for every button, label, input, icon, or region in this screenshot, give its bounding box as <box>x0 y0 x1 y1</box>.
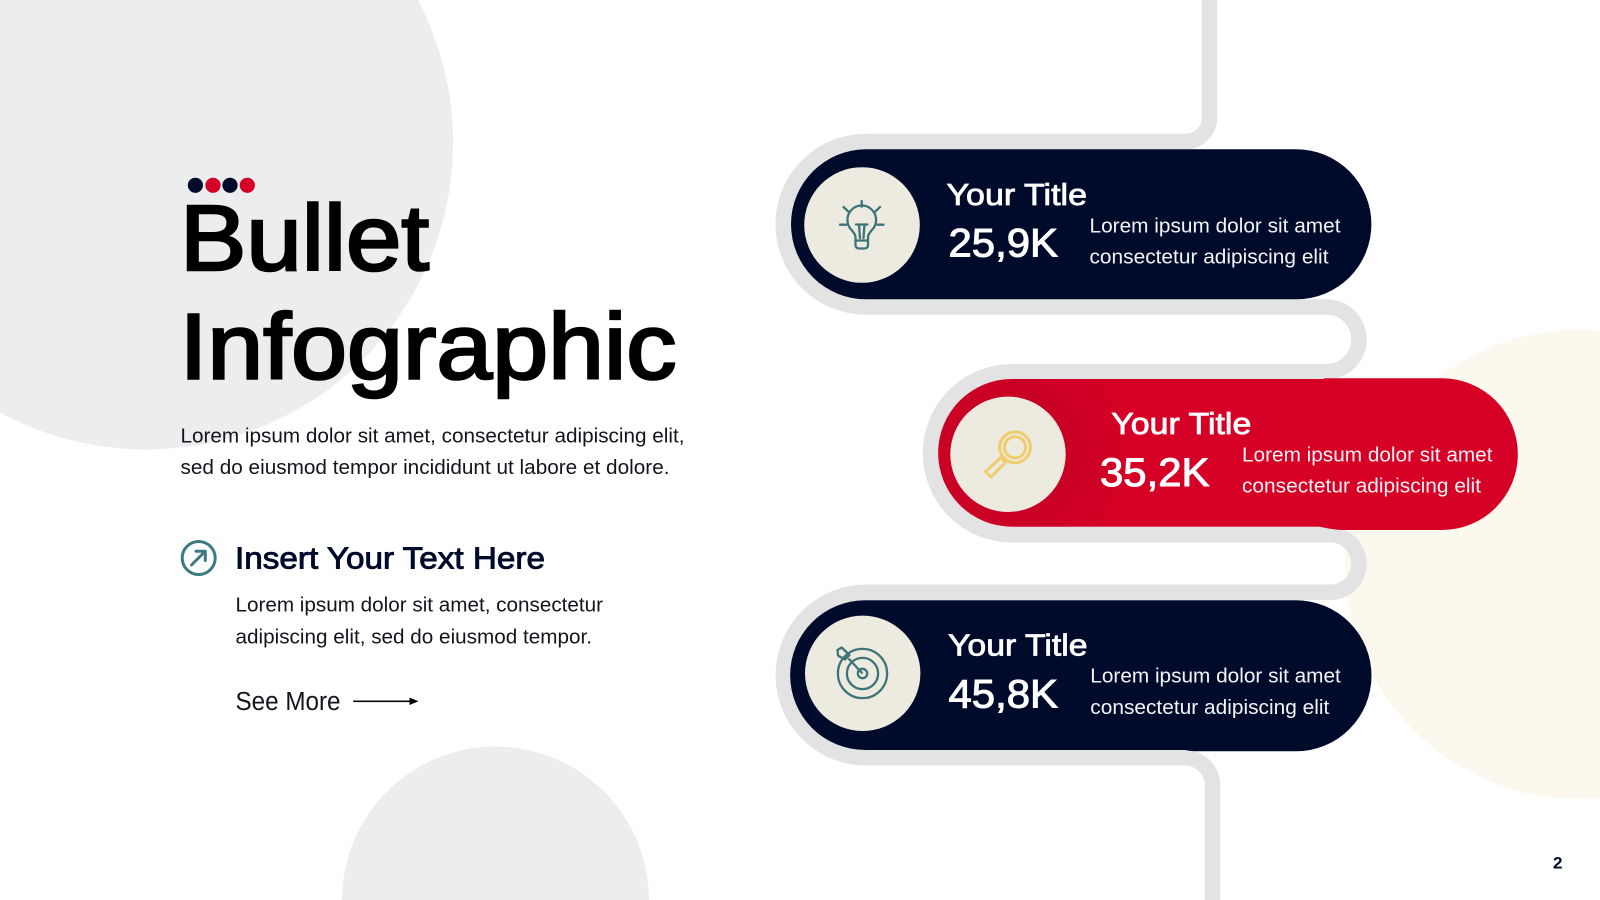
card title: Your Title <box>1111 406 1251 441</box>
background circle: right cream <box>1345 330 1600 799</box>
description <box>1090 666 1341 719</box>
description: consectetur adipiscing elit <box>1242 476 1481 498</box>
winding grey track <box>783 0 1359 900</box>
description <box>1090 215 1341 268</box>
card title: Your Title <box>946 177 1087 212</box>
intro paragraph: sed do eiusmod tempor incididunt ut labore et dolore. <box>180 457 670 479</box>
description: consectetur adipiscing elit <box>1090 697 1330 719</box>
pill background navy <box>790 600 1372 751</box>
subheading: Insert Your Text Here <box>235 541 545 576</box>
title: Bullet <box>180 186 429 290</box>
sub paragraph: adipiscing elit, sed do eiusmod tempor. <box>236 626 592 648</box>
icon: target <box>805 616 920 731</box>
card title: Your Title <box>948 627 1088 662</box>
page number: 2 <box>1553 854 1562 872</box>
title: Infographic <box>180 294 676 398</box>
sub paragraph <box>236 595 603 648</box>
icon: light bulb <box>804 167 920 283</box>
panel: third item <box>790 600 1372 751</box>
description: Lorem ipsum dolor sit amet <box>1090 215 1341 237</box>
description: consectetur adipiscing elit <box>1090 246 1329 268</box>
background circle: top left <box>0 0 453 449</box>
value: 25,9K <box>948 222 1058 266</box>
description: Lorem ipsum dolor sit amet <box>1242 445 1493 467</box>
panel: first item <box>791 149 1371 299</box>
pill background navy <box>791 149 1371 299</box>
see more link: See More <box>236 688 340 716</box>
sub paragraph: Lorem ipsum dolor sit amet, consectetur <box>236 595 603 617</box>
arrow: see more <box>353 698 418 705</box>
description <box>1242 445 1493 498</box>
soft shade around icon <box>938 379 1133 527</box>
background circle: bottom <box>342 746 649 900</box>
pill background red <box>938 378 1518 530</box>
value: 45,8K <box>948 672 1058 716</box>
title <box>180 186 676 398</box>
panel: second item <box>938 378 1518 530</box>
icon: circled arrow <box>182 542 215 574</box>
intro paragraph: Lorem ipsum dolor sit amet, consectetur adipiscing elit, <box>180 426 684 448</box>
description: Lorem ipsum dolor sit amet <box>1090 666 1341 688</box>
icon: magnifier <box>950 397 1066 512</box>
value: 35,2K <box>1100 451 1210 495</box>
intro paragraph <box>180 426 684 479</box>
decorative dots <box>188 178 255 193</box>
